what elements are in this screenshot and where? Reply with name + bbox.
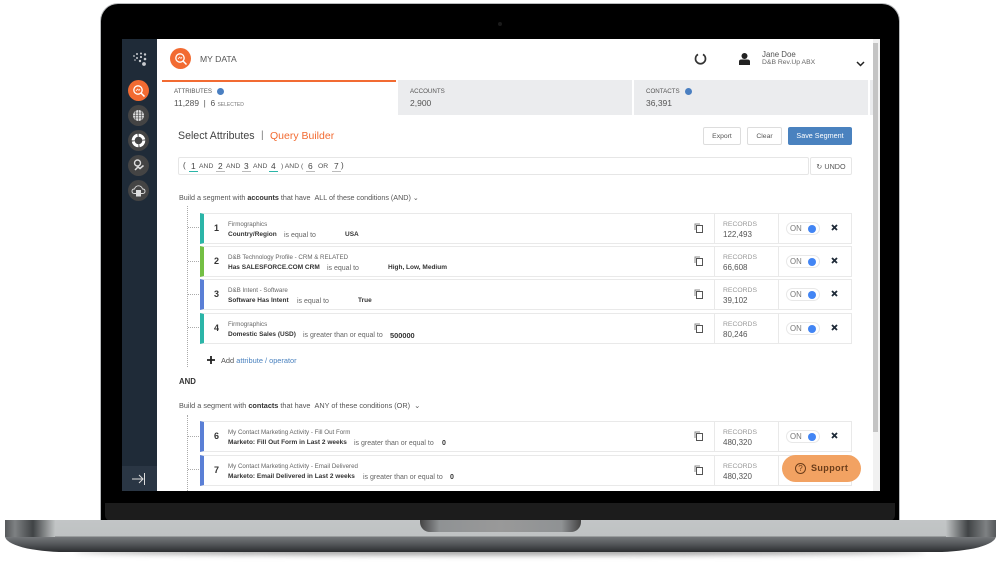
remove icon: [831, 290, 838, 297]
query expression: ) AND (: [281, 163, 303, 170]
copy icon: [694, 256, 703, 266]
base shadow: [75, 548, 925, 555]
tab sliver: [870, 80, 873, 115]
nav icon: globe: [128, 105, 149, 126]
operator: is equal to: [297, 298, 329, 304]
operator: is greater than or equal to: [363, 474, 443, 480]
remove icon: [831, 257, 838, 264]
contacts count: 36,391: [646, 98, 672, 108]
toggle: ON: [790, 224, 802, 233]
copy icon: [694, 324, 703, 333]
contacts tree connector: [187, 415, 200, 491]
button: export: [703, 127, 741, 145]
toggle: [786, 430, 820, 443]
remove icon: [831, 432, 838, 439]
condition row 6: [200, 421, 852, 452]
query expression: 1: [191, 161, 196, 171]
AND label: AND: [179, 376, 196, 386]
heading: select attributes: Select Attributes: [178, 130, 255, 142]
operator: is greater than or equal to: [354, 440, 434, 446]
attribute: Software Has Intent: [228, 296, 289, 304]
records count: 39,102: [723, 296, 747, 305]
records label: RECORDS: [723, 287, 757, 294]
operator: is equal to: [284, 232, 316, 238]
nav icon: segment: [128, 155, 149, 176]
tab: attributes: [162, 80, 396, 115]
contacts info icon: [685, 88, 692, 95]
button: save segment: Save Segment: [796, 131, 844, 140]
toggle: ON: [790, 324, 802, 333]
condition row 2: [200, 246, 852, 277]
condition row 7: [200, 455, 852, 486]
hinge notch: [420, 520, 581, 532]
value: USA: [345, 230, 359, 238]
screen: [122, 39, 880, 491]
remove icon: [831, 224, 838, 231]
attribute: Marketo: Email Delivered in Last 2 weeks: [228, 472, 355, 480]
copy icon: [694, 224, 703, 233]
contacts rule sentence: Build a segment with contacts that have ANY of these conditions (OR) ⌄: [179, 401, 420, 410]
operator: is greater than or equal to: [303, 332, 383, 338]
value: True: [358, 296, 372, 304]
copy icon: [694, 466, 703, 475]
category: My Contact Marketing Activity - Email Delivered: [228, 462, 358, 470]
base end shading left: [5, 520, 55, 537]
nav icon: cloud: [128, 180, 149, 201]
query expression: 7: [334, 161, 339, 171]
number: 6: [214, 431, 219, 441]
attribute: Has SALESFORCE.COM CRM: [228, 264, 320, 270]
logo: [133, 52, 146, 66]
support icon: [795, 463, 806, 474]
attributes label: ATTRIBUTES: [174, 88, 212, 95]
button: clear: [747, 127, 782, 145]
attribute: Country/Region: [228, 230, 277, 238]
records label: RECORDS: [723, 321, 757, 328]
condition row 3: [200, 279, 852, 310]
value: 0: [442, 440, 446, 446]
heading: query builder: Query Builder: [270, 130, 334, 142]
collapse button: [122, 466, 157, 491]
user organisation: D&B Rev.Up ABX: [762, 59, 815, 66]
category: My Contact Marketing Activity - Fill Out Form: [228, 428, 350, 436]
number: 7: [214, 465, 219, 475]
query expression: 3: [244, 161, 249, 171]
toggle: [786, 255, 820, 268]
add attribute link: Add attribute / operator: [221, 356, 297, 364]
query expression: AND: [199, 163, 213, 170]
nav icon: ring: [128, 130, 149, 151]
number: 2: [214, 256, 219, 266]
category: Firmographics: [228, 320, 267, 328]
query expression: (: [183, 161, 186, 170]
toggle: [786, 288, 820, 301]
support icon: ?: [798, 464, 803, 473]
camera: [498, 22, 502, 26]
value: 0: [450, 474, 454, 480]
header icon: [170, 48, 191, 69]
accounts tree connector: [187, 206, 200, 367]
accounts rule sentence: Build a segment with accounts that have ALL of these conditions (AND) ⌄: [179, 193, 419, 202]
sidebar: [122, 39, 157, 491]
copy icon: [694, 290, 703, 299]
remove icon: [831, 324, 838, 331]
attribute: Marketo: Fill Out Form in Last 2 weeks: [228, 438, 347, 446]
lid lower bezel: [105, 503, 895, 521]
nav icon: my data: [128, 80, 149, 101]
records label: RECORDS: [723, 429, 757, 436]
laptop lid: [100, 3, 900, 521]
attribute: Domestic Sales (USD): [228, 330, 296, 338]
query expression: [183, 161, 344, 172]
records count: 480,320: [723, 472, 752, 481]
button: export: Export: [712, 133, 732, 140]
support label: Support: [811, 463, 848, 473]
toggle: [786, 322, 820, 335]
undo button: [810, 157, 852, 175]
category: D&B Intent - Software: [228, 286, 288, 294]
query expression: 4: [271, 161, 276, 171]
records count: 66,608: [723, 263, 747, 272]
info icon: [217, 88, 224, 95]
user name: Jane Doe: [762, 50, 796, 59]
toggle: ON: [790, 432, 802, 441]
records count: 480,320: [723, 438, 752, 447]
condition row 4: [200, 313, 852, 344]
records label: RECORDS: [723, 463, 757, 470]
category: D&B Technology Profile - CRM & RELATED: [228, 254, 348, 260]
condition row 1: [200, 213, 852, 244]
undo button: ↻ UNDO: [816, 162, 846, 171]
page title: MY DATA: [200, 54, 237, 64]
records label: RECORDS: [723, 221, 757, 228]
dropdown chevron: [856, 62, 864, 66]
laptop base: [5, 520, 996, 552]
category: Firmographics: [228, 220, 267, 228]
query expression: ): [341, 161, 344, 170]
accounts label: ACCOUNTS: [410, 88, 445, 95]
button: clear: Clear: [756, 133, 773, 140]
button: save segment: [788, 127, 852, 145]
support button: [782, 455, 861, 482]
accounts count: 2,900: [410, 98, 431, 108]
value: High, Low, Medium: [388, 264, 447, 270]
base end shading right: [946, 520, 996, 537]
query expression: 6: [308, 161, 313, 171]
contacts label: CONTACTS: [646, 88, 680, 95]
query expression box: [178, 157, 809, 175]
toggle: [786, 222, 820, 235]
number: 1: [214, 223, 219, 233]
toggle: ON: [790, 290, 802, 299]
value: 500000: [390, 330, 415, 340]
scrollbar: [873, 39, 880, 491]
attributes count: 11,289 | 6 SELECTED: [174, 98, 244, 108]
heading separator: |: [261, 130, 264, 141]
records label: RECORDS: [723, 254, 757, 261]
number: 3: [214, 289, 219, 299]
refresh icon: [694, 54, 706, 65]
add attribute icon: [207, 356, 215, 364]
query expression: AND: [253, 163, 267, 170]
tab: accounts: [398, 80, 632, 115]
number: 4: [214, 323, 219, 333]
query expression: 2: [218, 161, 223, 171]
tab: contacts: [634, 80, 868, 115]
query expression: AND: [226, 163, 240, 170]
copy icon: [694, 432, 703, 441]
toggle: ON: [790, 257, 802, 266]
user icon: [739, 53, 750, 65]
query expression: OR: [318, 163, 328, 170]
operator: is equal to: [327, 264, 359, 272]
records count: 80,246: [723, 330, 747, 339]
records count: 122,493: [723, 230, 752, 239]
